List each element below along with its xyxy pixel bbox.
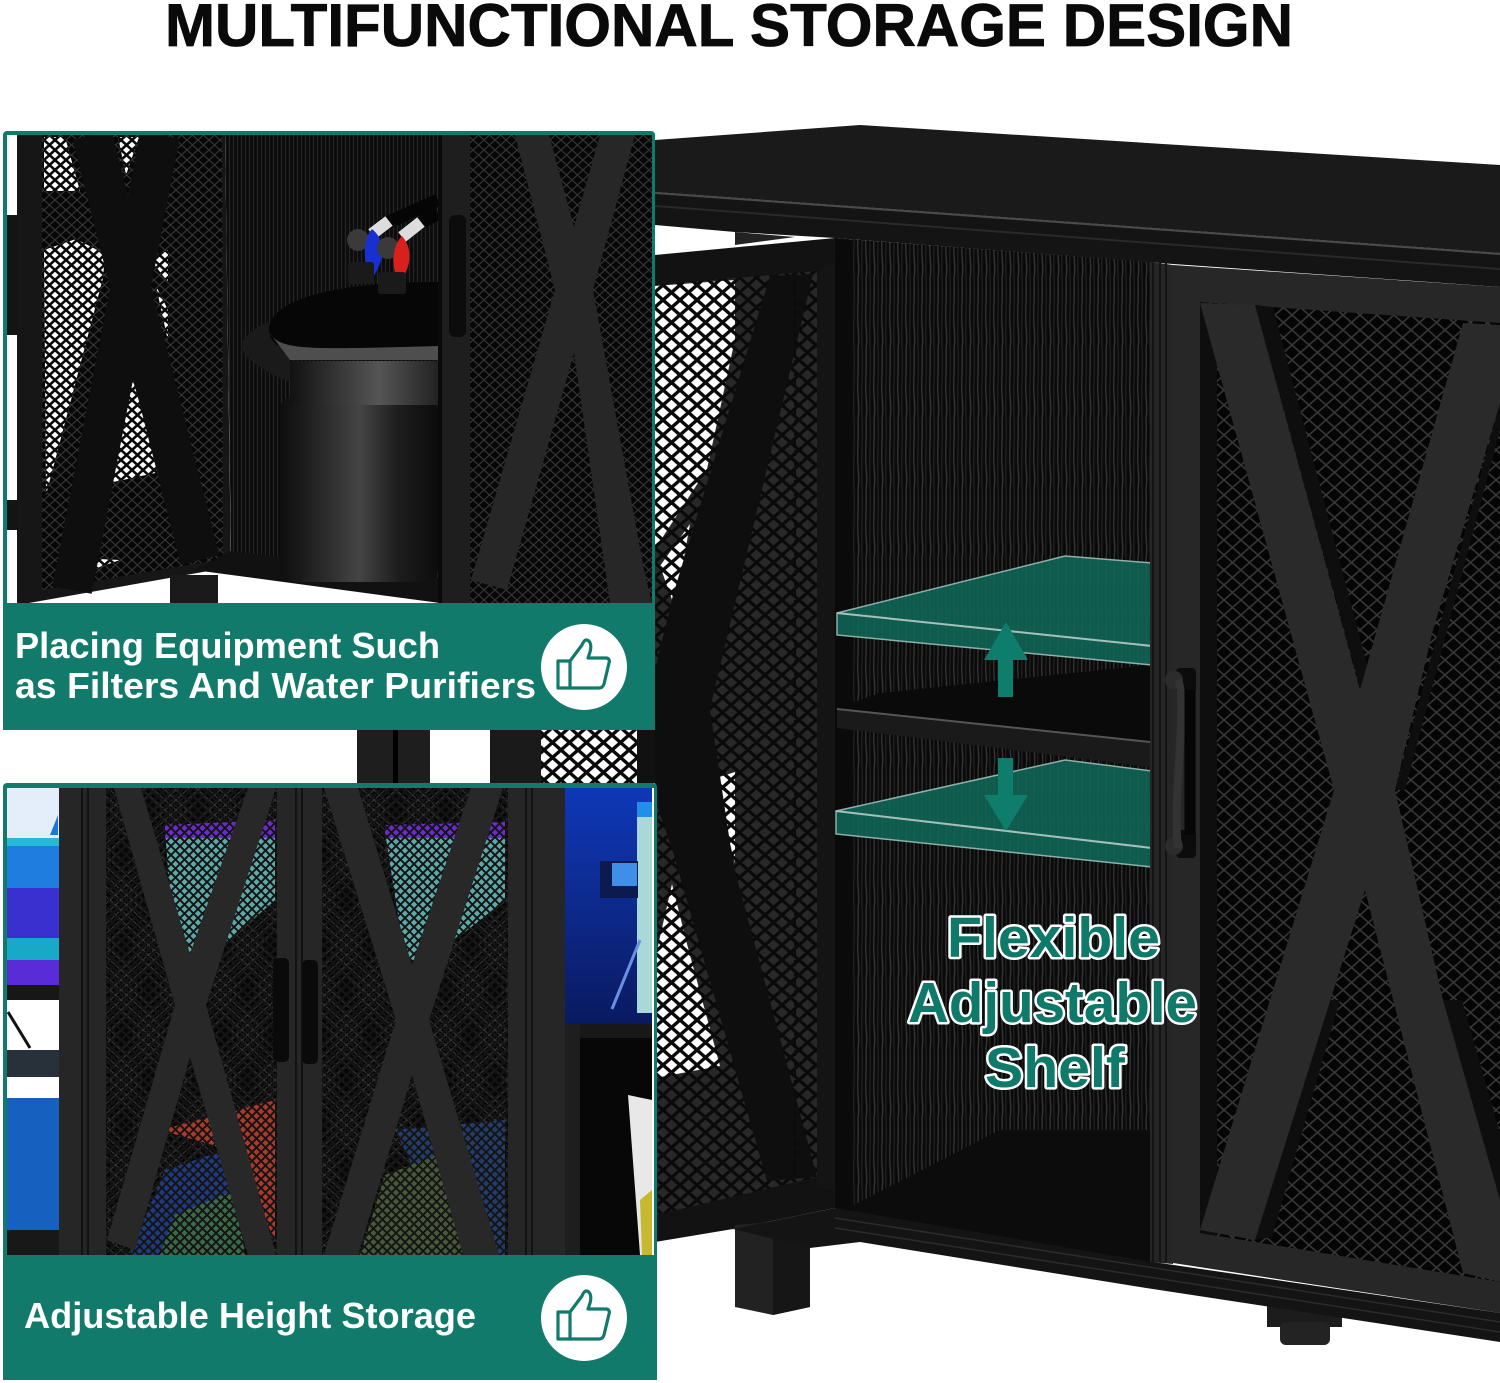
X brace shadows <box>1255 305 1375 695</box>
right door contents <box>322 788 508 1255</box>
X brace <box>1200 303 1500 1282</box>
filter canister body <box>240 282 438 582</box>
door handle <box>449 215 466 337</box>
callout: Flexible Adjustable Shelf: Adjustable <box>908 971 1197 1035</box>
cabinet top front edge <box>655 192 1500 287</box>
banner <box>3 603 655 730</box>
fixed shelf <box>837 665 1150 767</box>
photo: closed double doors with lit aquarium <box>7 788 652 1255</box>
door frames <box>59 788 565 1255</box>
bottom rail and feet <box>733 1208 1500 1345</box>
photo: cabinet with filter <box>7 135 652 603</box>
closed right door <box>1173 265 1500 1313</box>
double door handles <box>273 958 318 1064</box>
callout: Flexible Adjustable Shelf <box>908 906 1197 1100</box>
callout: Flexible Adjustable Shelf: Flexible <box>947 906 1160 970</box>
icon: thumbs up <box>541 624 627 710</box>
upper translucent shelf <box>837 556 1152 665</box>
panel: adjustable height storage <box>3 783 657 1380</box>
arrow: up <box>984 622 1028 697</box>
caption <box>15 625 536 706</box>
caption: Adjustable Height Storage <box>24 1295 476 1336</box>
open door <box>655 238 835 1242</box>
caption: Placing Equipment Such <box>15 625 440 666</box>
left open door <box>17 135 231 603</box>
hoses and valves <box>347 200 438 294</box>
callout: Flexible Adjustable Shelf: Shelf <box>985 1036 1126 1100</box>
right lit section <box>565 788 652 1255</box>
shelf floor and legs <box>65 580 170 603</box>
lower translucent shelf <box>836 760 1152 867</box>
door frame post <box>1150 262 1173 1264</box>
banner <box>3 1255 657 1380</box>
caption: as Filters And Water Purifiers <box>15 665 536 706</box>
door handle <box>1165 668 1196 858</box>
arrow: down <box>984 758 1028 831</box>
right door <box>442 135 470 603</box>
open door X brace <box>655 274 817 1181</box>
icon: thumbs up <box>541 1275 627 1361</box>
cabinet photo: open side with adjustable shelf <box>357 125 1500 1345</box>
left aquarium and cooler <box>7 788 59 1255</box>
panel: filter equipment <box>3 131 655 730</box>
cabinet interior <box>835 238 1150 1262</box>
cabinet top surface <box>655 125 1500 253</box>
openings through the open door mesh <box>655 280 735 549</box>
legs seen behind the panels <box>357 730 655 783</box>
gap above open door <box>735 232 795 245</box>
back wall <box>225 135 440 578</box>
left door contents <box>106 788 277 1255</box>
